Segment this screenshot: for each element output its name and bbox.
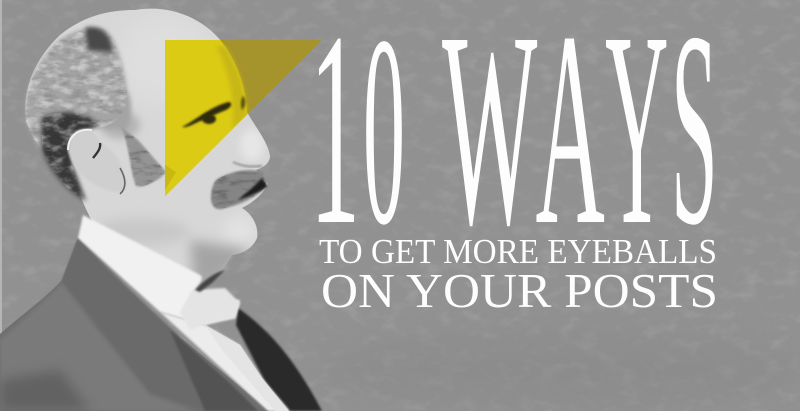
yellow triangle overlay <box>165 40 322 196</box>
nostril <box>233 162 262 167</box>
neck shadow <box>120 230 232 296</box>
head and face <box>25 9 270 292</box>
eye and eyebrow <box>182 102 231 127</box>
moustache <box>211 170 267 209</box>
subtitle line 2: ON YOUR POSTS <box>321 263 718 318</box>
ear <box>68 129 126 192</box>
portrait: man in profile <box>0 9 322 411</box>
hair <box>25 28 131 200</box>
dark right lapel <box>236 308 322 411</box>
yellow face tint inside triangle <box>165 40 249 196</box>
shirt front <box>160 312 290 411</box>
subtitle line 1: TO GET MORE EYEBALLS <box>319 232 717 271</box>
collar and bow tie <box>78 215 240 325</box>
sideburn <box>122 128 166 187</box>
jacket <box>0 238 270 411</box>
title: 10 WAYS <box>310 0 718 283</box>
